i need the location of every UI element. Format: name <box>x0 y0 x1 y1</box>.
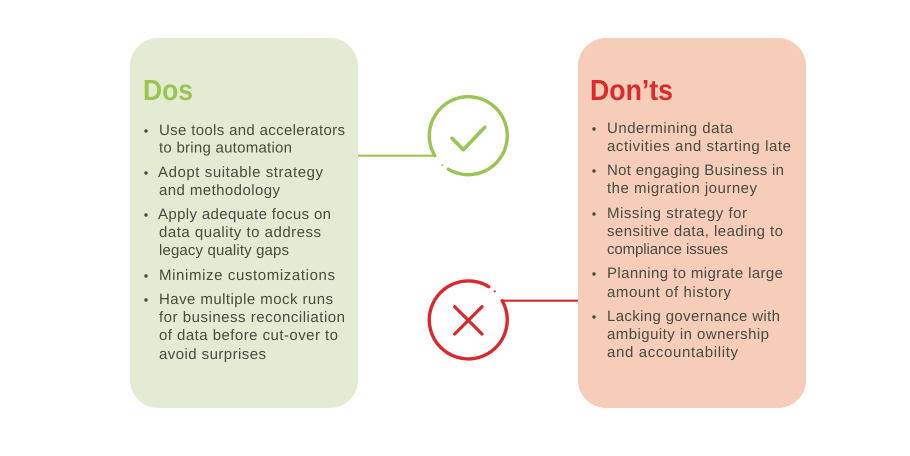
list: don'ts items: Undermining data <box>607 120 734 137</box>
list: dos items: to bring automation <box>159 140 292 156</box>
heading: don'ts: Don’ts <box>590 75 673 107</box>
list: dos items: Adopt suitable strategy <box>158 164 324 181</box>
panel: don'ts <box>578 38 806 408</box>
icon: check mark in circle with connector <box>358 97 507 175</box>
list: don'ts items: activities and starting late <box>607 138 791 155</box>
panel: dos <box>130 38 358 408</box>
list: dos items: Apply adequate focus on <box>158 206 331 223</box>
list: dos items: Have multiple mock runs <box>159 291 333 308</box>
list: dos items: of data before cut-over to <box>159 327 338 344</box>
list: don'ts items: Not engaging Business in <box>607 162 784 179</box>
list: don'ts items: Planning to migrate large <box>607 265 783 282</box>
icon: cross in circle with connector <box>429 281 578 359</box>
list: dos items: legacy quality gaps <box>159 242 289 259</box>
list: dos items: and methodology <box>159 182 280 199</box>
heading: dos: Dos <box>143 75 193 107</box>
list: don'ts items: the migration journey <box>607 180 758 197</box>
list: don'ts items: and accountability <box>607 344 738 361</box>
list: dos items: Use tools and accelerators <box>159 122 345 139</box>
list: don'ts items <box>592 120 791 361</box>
list: dos items <box>144 122 345 363</box>
list: don'ts items: Missing strategy for <box>607 205 747 222</box>
list: don'ts items: ambiguity in ownership <box>607 326 769 343</box>
list: dos items: for business reconciliation <box>159 309 345 326</box>
list: dos items: data quality to address <box>159 224 321 241</box>
list: don'ts items: sensitive data, leading to <box>607 223 783 240</box>
list: dos items: Minimize customizations <box>159 267 335 284</box>
list: don'ts items: compliance issues <box>607 241 728 258</box>
list: don'ts items: amount of history <box>607 284 732 301</box>
list: dos items: avoid surprises <box>159 346 266 363</box>
list: don'ts items: Lacking governance with <box>607 308 780 325</box>
